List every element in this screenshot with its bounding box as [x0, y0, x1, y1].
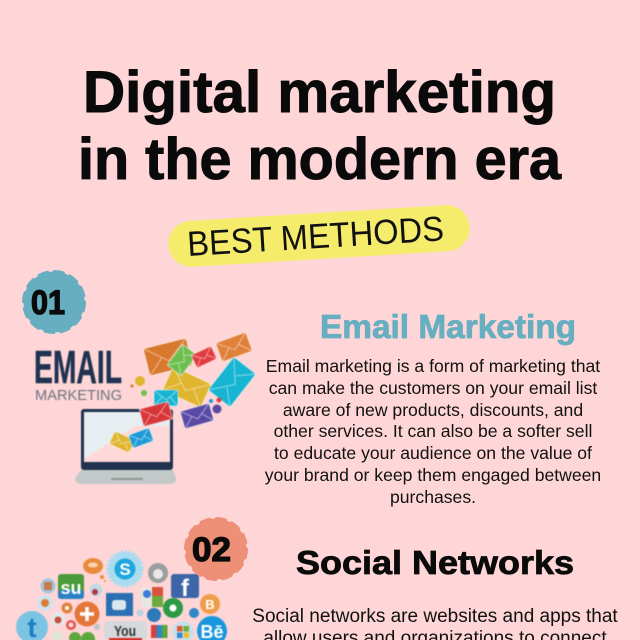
- icon: skype: [108, 552, 142, 586]
- wordmark: email marketing: EMAIL: [34, 341, 122, 393]
- illustration: email marketing: [34, 332, 256, 484]
- icon: blogger: [200, 594, 220, 614]
- text block: email marketing description: purchases.: [390, 487, 476, 507]
- text block: email marketing description: can make the customers on your email list: [269, 378, 597, 398]
- icon: twitter: [16, 611, 48, 640]
- icon: green share: [163, 598, 183, 618]
- icon: laptop: [75, 409, 176, 484]
- icon: plus: [74, 602, 100, 626]
- icon: youtube: [104, 621, 147, 640]
- wordmark: email marketing: [34, 341, 122, 404]
- text block: email marketing description: aware of new products, discounts, and: [283, 400, 583, 420]
- heading: email marketing: Email Marketing: [320, 308, 576, 345]
- icon: blogger: B: [205, 597, 215, 612]
- text block: social networks description: Social networks are websites and apps that: [252, 606, 618, 627]
- icon: stumbleupon: [58, 574, 84, 599]
- icon: green shapes: [52, 631, 95, 640]
- badge 02: [186, 518, 246, 580]
- heading: social networks: Social Networks: [296, 544, 574, 581]
- decorative dots: [130, 376, 222, 414]
- text block: email marketing description: Email marketing is a form of marketing that: [266, 356, 600, 376]
- icon: myspace: [106, 593, 133, 616]
- title: in the modern era: [78, 127, 562, 192]
- icon: behance: [197, 616, 227, 640]
- icon: facebook: f: [181, 575, 190, 602]
- text block: email marketing description: your brand or keep them engaged between: [265, 465, 601, 485]
- icon: small circles: [37, 578, 199, 630]
- icon: google plus: [141, 587, 163, 607]
- title: [78, 60, 562, 192]
- illustration: social network icons: [16, 552, 227, 640]
- icon: youtube: You: [114, 623, 136, 640]
- text block: email marketing description: other services. It can also be a softer sell: [274, 421, 592, 441]
- title: Digital marketing: [83, 60, 556, 125]
- icon: windows: [172, 621, 194, 640]
- wordmark: email marketing: MARKETING: [35, 387, 122, 404]
- text block: social networks description: [252, 606, 618, 640]
- icon: stumbleupon: su: [60, 578, 82, 598]
- subtitle pill: best methods: BEST METHODS: [186, 209, 445, 264]
- badge 01: [24, 272, 84, 332]
- icon: envelopes: [109, 332, 256, 453]
- icon: apple: [148, 563, 168, 583]
- icon: orange speech bubble: [83, 558, 106, 582]
- badge 01: 01: [31, 284, 65, 322]
- badge 02: 02: [192, 531, 231, 569]
- icon: facebook: [171, 574, 199, 602]
- text block: email marketing description: to educate your audience on the value of: [274, 443, 592, 463]
- icon: colored squares: [151, 625, 168, 638]
- icon: skype: S: [119, 560, 131, 579]
- text block: email marketing description: [265, 356, 601, 507]
